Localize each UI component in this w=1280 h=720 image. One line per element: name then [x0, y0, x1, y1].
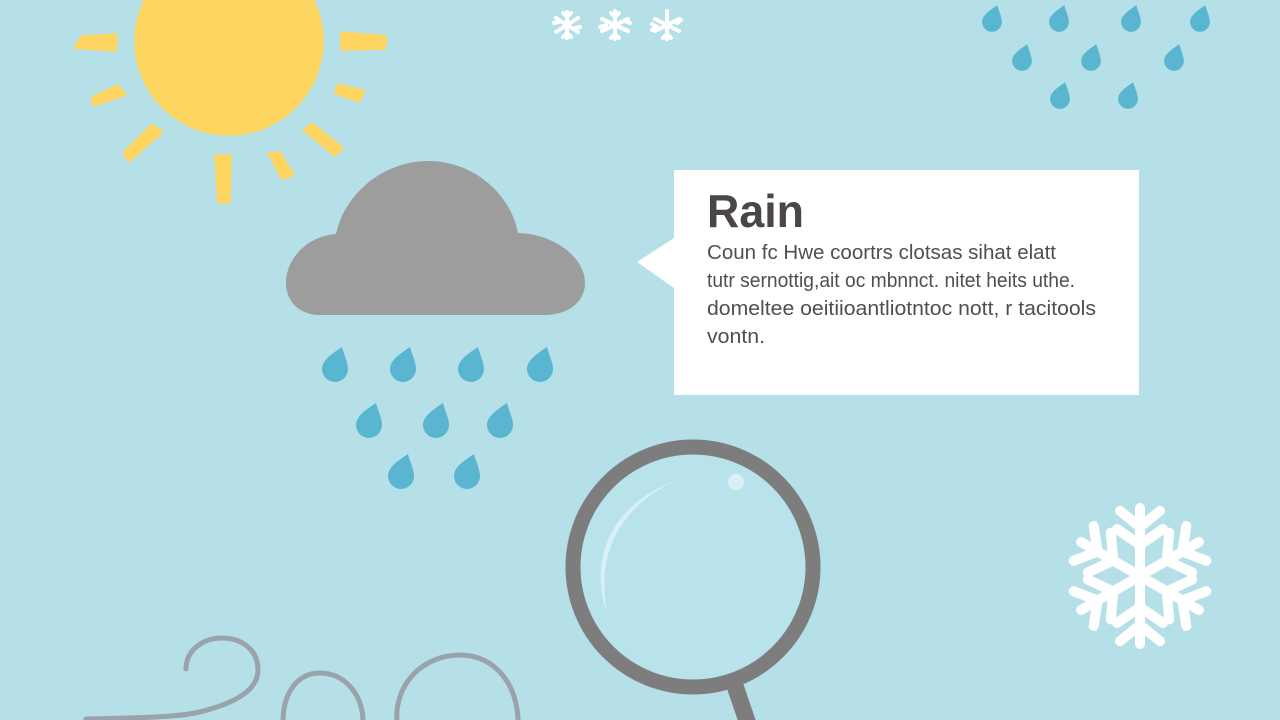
- text block: description: [707, 242, 1096, 348]
- icon: sun: [74, 0, 387, 203]
- icon: wind swirls: [86, 638, 518, 720]
- heading: Rain: Rain: [707, 185, 804, 237]
- icon: snowflakes small row: [554, 11, 681, 39]
- icon: raindrops top right: [982, 5, 1210, 109]
- icon: rain cloud: [286, 161, 585, 315]
- panel: rain callout: [637, 170, 1139, 395]
- text block: description: domeltee oeitiioantliotntoc nott, r tacitools: [707, 298, 1096, 320]
- text block: description: tutr sernottig,ait oc mbnnct. nitet heits uthe.: [707, 270, 1075, 292]
- icon: raindrops under cloud: [322, 347, 553, 489]
- callout box with pointer: [637, 170, 1139, 395]
- text block: description: Coun fc Hwe coortrs clotsas sihat elatt: [707, 242, 1056, 264]
- icon: magnifying glass: [573, 447, 813, 720]
- icon: large snowflake: [1070, 508, 1210, 644]
- text block: description: vontn.: [707, 326, 765, 348]
